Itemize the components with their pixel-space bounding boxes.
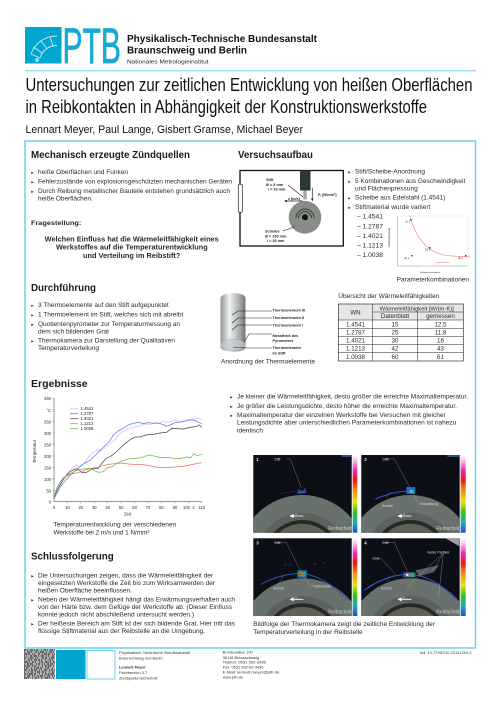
- figure: Thermoelemente: im Stift: [272, 352, 286, 356]
- chart: Parameterkombinationen: (5) 1: [458, 257, 464, 260]
- list: Versuchsaufbau: ►: [348, 196, 352, 201]
- question: und Verteilung im Reibstift?: [83, 253, 180, 260]
- table: Wärmeleitfähigkeit: 1.4021: [346, 338, 366, 344]
- figure: Thermoelemente: Thermoelement: [272, 346, 302, 350]
- list: Versuchsaufbau: –: [357, 214, 361, 221]
- list: Versuchsaufbau: –: [357, 252, 361, 259]
- list: Versuchsaufbau: –: [357, 233, 361, 240]
- thermal image 3: Reibscheibe: [328, 609, 356, 615]
- thermal image 2: [347, 455, 474, 622]
- list: Schlussfolgerung: von der Härte bzw. dem Gefüge der Werkstoffe ab. (Dieser Einfluss: [38, 604, 233, 611]
- chart: Parameterkombinationen: Gleitgeschwindigkeit: [420, 271, 440, 274]
- list: Durchführung: Temperaturverteilung: [38, 345, 99, 352]
- thermal image 1: v: [295, 512, 297, 516]
- table: Wärmeleitfähigkeit: 15: [392, 322, 399, 328]
- list: Versuchsaufbau: Stift/Scheibe-Anordnung: [355, 168, 425, 176]
- line chart: Temperatur: s: [192, 505, 195, 510]
- table: Wärmeleitfähigkeit: [338, 304, 463, 361]
- line chart: Temperatur: 110: [198, 505, 206, 510]
- diagram: Stift/Scheibe: l = 23 mm: [268, 188, 286, 192]
- line chart: Temperatur: Temperatur: [32, 439, 37, 463]
- thermal image 4: [347, 538, 474, 706]
- list: Durchführung: 1 Thermoelement im Stift, welches sich mit abreibt: [38, 312, 183, 318]
- caption: line chart: Werkstoffe bei 2 m/s und 1 N/mm²: [54, 530, 150, 536]
- heading: Schlussfolgerung: Schlussfolgerung: [31, 550, 114, 562]
- list: Zündquellen: [30, 169, 232, 202]
- figure: Thermoelemente: [220, 293, 305, 356]
- doi: doi: 10.7795/210.20131204 Z: [420, 650, 472, 655]
- chart legend: [70, 406, 94, 431]
- list: Durchführung: 3 Thermoelemente auf den Stift aufgepunktet: [38, 302, 169, 309]
- line chart: Temperatur: 60: [132, 505, 138, 510]
- authors: Lennart Meyer, Paul Lange, Gisbert Gramse, Michael Beyer: [26, 124, 303, 136]
- institute name: Physikalisch-Technische Bundesanstalt: [127, 34, 318, 45]
- table: Wärmeleitfähigkeit: 60: [392, 354, 399, 361]
- table: Wärmeleitfähigkeit: 11,8: [435, 330, 447, 336]
- thermal image 4: v: [403, 595, 405, 599]
- list: Durchführung: Thermokamera zur Darstellung der Qualitativen: [38, 338, 175, 344]
- thermal image 2: v: [403, 512, 405, 516]
- chart: Parameterkombinationen: (4) 1: [404, 257, 410, 260]
- footer: institute: Zündquellensicherheit: [119, 676, 158, 680]
- footer: institute: Physikalisch-Technische Bundesanstalt: [119, 650, 191, 655]
- footer: institute: [119, 650, 191, 680]
- caption: line chart: Temperaturentwicklung der verschiedenen: [54, 522, 177, 528]
- list: Versuchsaufbau: –: [357, 243, 361, 250]
- list: Durchführung: Quotientenpyrometer zur Temperaturmessung an: [38, 321, 180, 328]
- figure: Thermoelemente: Pyrometers: [272, 339, 293, 343]
- list: Schlussfolgerung: ►: [30, 622, 34, 626]
- institute name: Braunschweig und Berlin: [127, 46, 247, 56]
- list: Schlussfolgerung: [30, 572, 236, 635]
- line chart: Temperatur: 250: [44, 442, 52, 448]
- table: Wärmeleitfähigkeit: 1.2787: [346, 330, 366, 336]
- list: Schlussfolgerung: eingesetzten Werkstoffe die Zeit bis zum Wirksamwerden der: [38, 580, 216, 587]
- table: Wärmeleitfähigkeit: 1.1213: [346, 346, 366, 352]
- list: Versuchsaufbau: 1.0038: [362, 252, 383, 259]
- list: Versuchsaufbau: ►: [348, 205, 352, 210]
- list: Versuchsaufbau: 1.4021: [362, 233, 383, 240]
- QR code: [24, 649, 55, 679]
- list: Ergebnisse: Maximaltemperatur der einzelnen Werkstoffe bei Versuchen mit gleicher: [237, 412, 446, 419]
- chart legend: 1.1213: [80, 421, 94, 426]
- heading: Durchführung: Durchführung: [31, 282, 96, 294]
- caption: thermal images: [253, 621, 436, 636]
- table: Wärmeleitfähigkeit: Datenblatt: [381, 313, 409, 320]
- white box: [87, 650, 115, 679]
- line chart: Temperatur: 20: [78, 505, 84, 510]
- list: Ergebnisse: ►: [230, 413, 234, 418]
- thermal image 2: Stift: [382, 458, 389, 462]
- footer: institute: Fachbereich 3.7: [119, 670, 147, 675]
- list: Schlussfolgerung: heißen Oberfläche beeinflussen.: [38, 587, 132, 594]
- list: Ergebnisse: identisch: [237, 428, 263, 434]
- table: Wärmeleitfähigkeit: 30: [392, 338, 399, 344]
- thermal image 4: Stift: [382, 541, 389, 545]
- list: Ergebnisse: [230, 393, 468, 434]
- heading: Versuchsaufbau: Versuchsaufbau: [238, 149, 313, 161]
- footer: address: E-Mail: lennart.meyer@ptb.de: [223, 669, 280, 674]
- diagram: Stift/Scheibe: v [m/s]: [288, 197, 301, 201]
- footer: address: www.ptb.de: [223, 674, 244, 680]
- thermal image 3: 3: [256, 540, 259, 545]
- footer: address: Telefon: 0531 592-3436: [223, 660, 267, 664]
- figure: Thermoelemente: Thermoelement II: [272, 316, 304, 320]
- list: Schlussfolgerung: Neben der Wärmeleitfähigkeit hängt das Erwärmungsverhalten auch: [38, 596, 235, 604]
- institute name: Nationales Metrologieinstitut: [127, 60, 209, 66]
- line chart: Temperatur: 10: [65, 505, 70, 510]
- chart: Parameterkombinationen: (2) 1: [425, 248, 431, 252]
- table: Wärmeleitfähigkeit: WN: [350, 310, 361, 316]
- list: Versuchsaufbau: ►: [348, 170, 352, 174]
- thermal image 2: Reibscheibe: [436, 526, 464, 532]
- list: Zündquellen: heiße Oberflächen.: [38, 196, 93, 202]
- thermal image 1: [239, 455, 366, 622]
- thermal image 4: Abrieb: [381, 586, 392, 590]
- diagram: Stift/Scheibe: Scheibe: [265, 230, 280, 234]
- line chart: Temperatur: 50: [119, 505, 124, 510]
- thermal image 2: 2: [364, 457, 367, 462]
- list: Schlussfolgerung: konnte jedoch nicht abschließend untersucht werden.): [38, 612, 194, 618]
- list: Durchführung: ►: [30, 312, 34, 318]
- footer: address: Fax: 0531 592-69 3436: [223, 664, 264, 669]
- line chart: Temperatur: 350: [44, 420, 52, 424]
- chart legend: 1.4541: [80, 406, 94, 411]
- list: Durchführung: ►: [30, 322, 34, 327]
- list: Schlussfolgerung: Die Untersuchungen zeigen, dass die Wärmeleitfähigkeit der: [38, 572, 214, 580]
- line chart: Temperatur: 0: [53, 505, 56, 510]
- list: Versuchsaufbau: Stiftmaterial wurde variiert: [355, 204, 430, 211]
- caption: thermal images: Temperaturverteilung in der Reibstelle: [253, 629, 363, 636]
- thermal image 3: Vollkontakt: [313, 584, 331, 588]
- table heading: Übersicht der Wärmeleitfähigkeiten: [338, 292, 440, 300]
- footer: address: 38116 Braunschweig: [223, 655, 259, 660]
- list: Versuchsaufbau: 1.1213: [362, 243, 383, 250]
- list: Durchführung: ►: [30, 338, 34, 344]
- list: Schlussfolgerung: Der heißeste Bereich am Stift ist der sich bildende Grat. Hier tritt das: [38, 620, 236, 628]
- line chart: Temperatur: [32, 396, 206, 516]
- list: Ergebnisse: Je kleiner die Wärmeleitfähigkeit, desto größer die erreichte Maximaltemperatur.: [237, 393, 468, 400]
- line chart: Temperatur: 90: [173, 505, 178, 510]
- line chart: Temperatur: 40: [105, 505, 111, 510]
- chart: Parameterkombinationen: (1) 1: [405, 220, 411, 224]
- line chart: Temperatur: 80: [159, 505, 164, 510]
- list: Ergebnisse: Je größer die Leistungsdichte, desto höher die erreichte Maximaltemperatur.: [237, 403, 457, 410]
- diagram: Stift/Scheibe: P, [N/mm²]: [318, 193, 337, 197]
- thermal image 1: 1: [256, 457, 259, 462]
- line chart: Temperatur: 100: [44, 477, 52, 482]
- logo: PTB: [62, 18, 121, 74]
- list: Ergebnisse: ►: [230, 404, 234, 409]
- line chart: Temperatur: 50: [46, 488, 52, 494]
- thermal image 3: [239, 538, 366, 706]
- line chart: Temperatur: 30: [92, 505, 97, 510]
- list: Zündquellen: ►: [30, 180, 34, 184]
- thermal image 3: Stift: [274, 541, 281, 545]
- thermal image 4: Grat: [372, 556, 379, 560]
- line chart: Temperatur: °C: [46, 408, 51, 413]
- heading: Fragestellung: Fragestellung:: [31, 220, 81, 227]
- line chart: Temperatur: 70: [146, 505, 151, 510]
- table: Wärmeleitfähigkeit: 61: [437, 354, 444, 361]
- table: Wärmeleitfähigkeit: 1.4541: [346, 322, 366, 328]
- list: Versuchsaufbau: 1.4541: [362, 214, 383, 221]
- table: Wärmeleitfähigkeit: Wärmeleitfähigkeit [W/(m·K)]: [380, 306, 454, 312]
- question: Welchen Einfluss hat die Wärmeleitfähigkeit eines: [45, 236, 219, 244]
- caption: Thermoelemente: Anordnung der Thermoelemente: [221, 358, 316, 366]
- list: Zündquellen: ►: [30, 170, 34, 175]
- table: Wärmeleitfähigkeit: 43: [437, 346, 444, 352]
- diagram: Stift/Scheibe: l = 20 mm: [267, 239, 285, 243]
- diagram: Stift/Scheibe: Ø = 150 mm: [265, 234, 287, 238]
- heading: Ergebnisse: Ergebnisse: [31, 378, 88, 390]
- figure: Thermoelemente: Thermoelement I: [272, 323, 303, 327]
- caption: line chart: [54, 522, 177, 536]
- thermal image 4: 4: [364, 540, 367, 545]
- thermal image 3: Abrieb: [273, 586, 284, 590]
- thermal image 1: Stift: [274, 458, 281, 462]
- chart legend: 1.0038: [80, 426, 94, 431]
- diagram: Stift/Scheibe: [238, 170, 343, 246]
- logo: [25, 18, 121, 74]
- heading: Mechanisch erzeugte Zündquellen: Mechanisch erzeugte Zündquellen: [31, 149, 190, 161]
- table: Wärmeleitfähigkeit: 25: [392, 330, 399, 336]
- list: Durchführung: dem sich bildenden Grat: [38, 328, 109, 336]
- list: Versuchsaufbau: ►: [348, 179, 352, 184]
- chart legend: 1.2787: [80, 411, 94, 416]
- footer: address: Bundesallee 100: [223, 650, 254, 654]
- table: Wärmeleitfähigkeit: 16: [437, 338, 444, 344]
- list: Schlussfolgerung: flüssige Stiftmaterial aus der Reibstelle an die Umgebung.: [38, 628, 205, 635]
- thermal image 4: heiße Partikel: [427, 550, 449, 554]
- list: Ergebnisse: ►: [230, 394, 234, 399]
- institute name: [127, 34, 318, 66]
- line chart: Temperatur: 300: [44, 431, 52, 436]
- thermal image 2: Abrieb: [382, 504, 393, 508]
- table: Wärmeleitfähigkeit: 42: [392, 346, 399, 352]
- list: Ergebnisse: Leistungsdichte aber unterschiedlichen Parameterkombinationen ist nahezu: [237, 420, 457, 426]
- diagram: Stift/Scheibe: Ø = 8 mm: [266, 183, 284, 187]
- chart legend: 1.4021: [80, 416, 94, 421]
- thermal image 2: Anpassung: [420, 502, 438, 506]
- caption: Parameterkombinationen: Parameterkombinationen: [397, 276, 469, 284]
- list: Versuchsaufbau: 1.2787: [362, 223, 383, 230]
- list: Durchführung: [30, 302, 183, 352]
- list: Zündquellen: Fehlerzustände von explosionsgeschützten mechanischen Geräten: [38, 178, 232, 186]
- question: Werkstoffes auf die Temperaturentwicklung: [56, 244, 208, 252]
- list: Zündquellen: heiße Oberflächen und Funken: [38, 169, 128, 176]
- line chart: Temperatur: 200: [44, 454, 52, 459]
- line chart: Temperatur: 100: [183, 505, 191, 510]
- figure: Thermoelemente: Thermoelement III: [272, 308, 305, 312]
- list: Schlussfolgerung: ►: [30, 598, 34, 602]
- thermal image 4: Reibscheibe: [436, 609, 464, 615]
- chart: Parameterkombinationen: [388, 216, 470, 274]
- footer: address: [223, 650, 280, 680]
- list: Schlussfolgerung: ►: [30, 574, 34, 578]
- table: Wärmeleitfähigkeit: 1.0038: [346, 354, 366, 361]
- list: Versuchsaufbau: und Flächenpressung: [355, 186, 418, 193]
- chart: Parameterkombinationen: Flächenpressung: [388, 227, 391, 247]
- thermal image 1: Reibscheibe: [328, 526, 356, 532]
- line chart: Temperatur: Zeit: [124, 512, 132, 516]
- line chart: Temperatur: 150: [44, 466, 52, 470]
- footer: institute: Braunschweig und Berlin: [119, 656, 163, 660]
- line chart: Temperatur: 450: [44, 396, 52, 401]
- thermal image 3: v: [295, 595, 297, 599]
- list: Versuchsaufbau: 5 Kombinationen aus Geschwindigkeit: [355, 178, 465, 185]
- figure: Thermoelemente: Messfleck des: [272, 334, 298, 338]
- footer: institute: Lennart Meyer: [119, 664, 146, 670]
- list: Zündquellen: ►: [30, 189, 34, 194]
- main panel: [25, 141, 476, 648]
- list: Versuchsaufbau: –: [357, 223, 361, 230]
- question: [45, 236, 219, 260]
- caption: thermal images: Bildfolge der Thermokamera zeigt die zeitliche Entwicklung der: [253, 621, 436, 628]
- list: Versuchsaufbau: [348, 168, 465, 259]
- blue square: [56, 650, 86, 679]
- title: [26, 74, 472, 117]
- diagram: Stift/Scheibe: Stift: [266, 178, 274, 182]
- list: Zündquellen: Durch Reibung metallischer Bauteile entstehen grundsätzlich auch: [38, 188, 230, 195]
- table: Wärmeleitfähigkeit: gemessen: [426, 313, 455, 320]
- line chart: Temperatur: 0: [49, 500, 52, 504]
- table: Wärmeleitfähigkeit: 12,5: [434, 322, 447, 328]
- list: Durchführung: ►: [30, 303, 34, 308]
- list: Versuchsaufbau: Scheibe aus Edelstahl (1.4541): [355, 195, 445, 202]
